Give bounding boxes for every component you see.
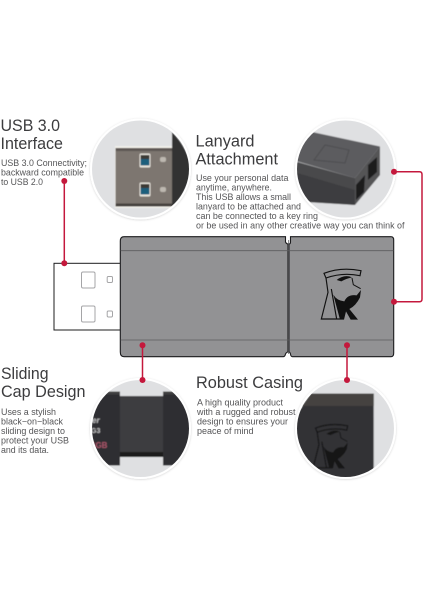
circle photo: robust casing	[290, 378, 398, 480]
text: Robust casing description: design to ensures your	[197, 416, 288, 426]
text: Lanyard description: or be used in any other creative way you can think of	[196, 220, 405, 230]
text: Sliding cap description: protect your USB	[1, 436, 69, 446]
heading: Sliding Cap Design: Cap Design	[1, 382, 86, 401]
Kingston logo	[321, 269, 361, 320]
connector: USB interface callout	[61, 178, 67, 266]
heading: Robust Casing: Robust Casing	[196, 373, 303, 392]
heading: Sliding Cap Design	[1, 364, 86, 401]
text: Lanyard description	[196, 173, 405, 230]
text: Robust casing description	[196, 398, 296, 436]
connector: robust casing callout	[344, 342, 350, 383]
text: Robust casing description: peace of mind	[197, 426, 254, 436]
circle photo: lanyard end of cap	[294, 118, 398, 220]
body seam lines	[120, 240, 394, 354]
connector: sliding cap callout	[140, 342, 146, 383]
text: USB 3.0 description	[1, 158, 87, 187]
text: Sliding cap description: and its data.	[1, 445, 49, 455]
text: Lanyard description: lanyard to be attached and	[196, 202, 301, 212]
text: Lanyard description: can be connected to a key ring	[196, 211, 318, 221]
text: Lanyard description: Use your personal data	[196, 173, 289, 183]
text: Lanyard description: This USB allows a small	[196, 192, 291, 202]
circle photo: sliding cap: G3	[91, 428, 100, 435]
text: USB 3.0 description: USB 3.0 Connectivity;	[1, 158, 87, 168]
circle photo: sliding cap: er	[92, 416, 100, 425]
heading: Lanyard Attachment: Attachment	[196, 150, 278, 168]
connector: lanyard callout	[391, 169, 422, 305]
USB plug	[54, 263, 122, 330]
heading: Lanyard Attachment: Lanyard	[196, 132, 254, 150]
heading: USB 3.0 Interface: Interface	[0, 134, 63, 153]
text: Robust casing description: with a rugged and robust	[196, 407, 296, 417]
text: Sliding cap description	[1, 407, 69, 455]
text: Sliding cap description: sliding design to	[1, 426, 65, 436]
drive body: end section	[289, 237, 394, 357]
text: USB 3.0 description: to USB 2.0	[1, 177, 43, 187]
heading: Sliding Cap Design: Sliding	[1, 364, 48, 383]
circle photo: USB connector	[90, 118, 192, 220]
text: USB 3.0 description: backward compatible	[1, 168, 84, 178]
plug contact holes	[82, 272, 112, 322]
text: Sliding cap description: black−on−black	[1, 416, 64, 426]
circle photo: sliding cap: 6GB	[91, 441, 108, 450]
text: Sliding cap description: Uses a stylish	[1, 407, 56, 417]
heading: USB 3.0 Interface: USB 3.0	[0, 116, 60, 135]
circle photo: sliding cap	[88, 378, 193, 480]
drive body: sliding cap section	[120, 237, 288, 357]
heading: Lanyard Attachment	[196, 132, 278, 168]
heading: USB 3.0 Interface	[0, 116, 63, 153]
text: Robust casing description: A high quality product	[197, 398, 284, 408]
text: Lanyard description: anytime, anywhere.	[196, 182, 272, 192]
